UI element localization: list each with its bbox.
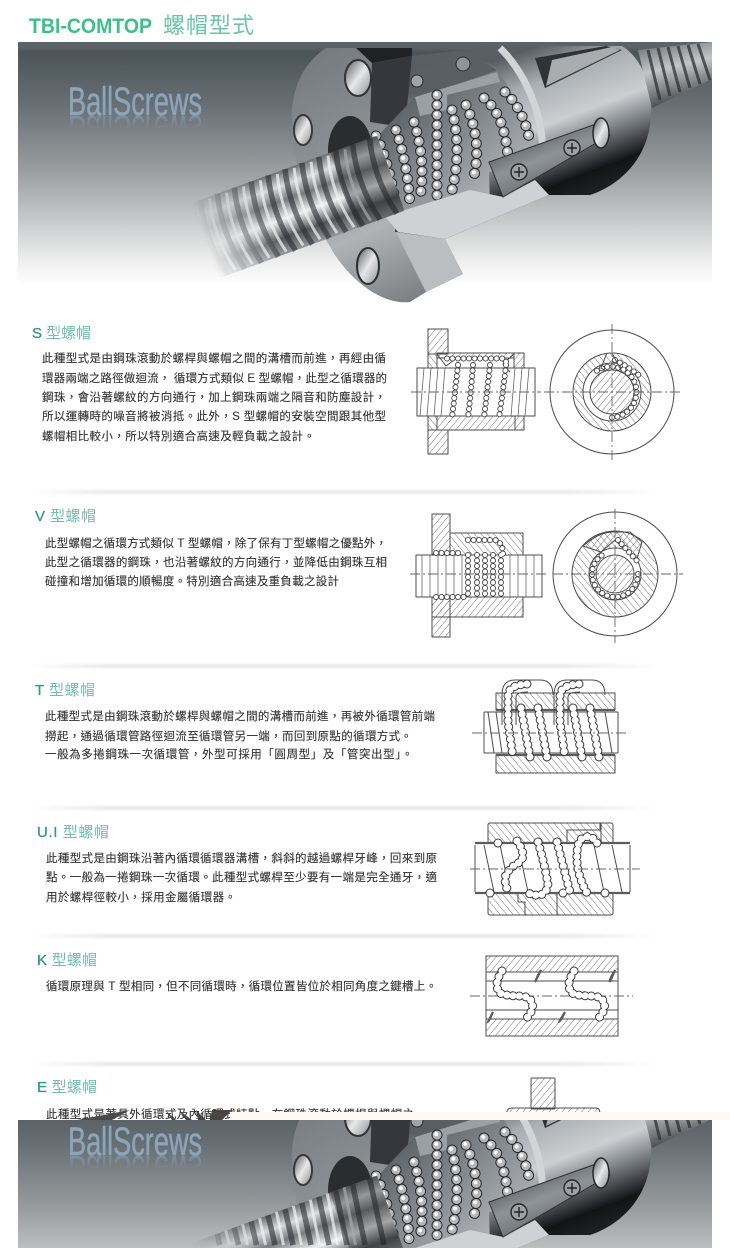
section: U.I type nut <box>37 823 640 915</box>
description: U.I type: 此種型式是由鋼珠沿著內循環循環器溝槽，斜斜的越過螺桿牙峰，回來到原 <box>46 851 437 865</box>
divider <box>30 664 660 668</box>
description: V type: 此型螺帽之循環方式類似 T 型螺帽，除了保有丁型螺帽之優點外， <box>45 536 387 550</box>
description: S type <box>42 351 387 443</box>
hero image: cutaway ball nut <box>191 42 712 302</box>
hero title: BallScrews: BallScrews <box>68 80 202 124</box>
heading: U.I type: U.I 型螺帽 <box>37 824 109 841</box>
description: T type: 此種型式是由鋼珠滾動於螺桿與螺帽之間的溝槽而前進，再被外循環管前端 <box>45 709 435 723</box>
section: E type nut <box>37 1078 600 1121</box>
description: T type <box>45 709 435 761</box>
repeated hero banner (cropped) <box>18 1120 712 1248</box>
divider <box>30 806 660 810</box>
divider <box>30 934 660 938</box>
description: S type: 鋼珠，會沿著螺紋的方向通行，加上鋼珠兩端之隔音和防塵設計， <box>42 390 386 404</box>
title: TBI-COMTOP <box>29 15 152 38</box>
diagram: T type <box>472 680 627 773</box>
dark image fragments above repeated banner <box>77 1110 232 1120</box>
repeated hero title: BallScrews: BallScrews <box>68 1147 202 1191</box>
section: K type nut <box>37 952 633 1036</box>
section: T type nut <box>35 680 627 773</box>
description: U.I type: 用於螺桿徑較小，採用金屬循環器。 <box>46 890 236 904</box>
diagram: S type section <box>411 329 541 454</box>
repeated hero image: cutaway ball nut <box>198 1120 710 1248</box>
description: E type: 此種型式是著具外循環式及內循環式特點，在鋼珠滾動於螺桿與螺帽之 <box>46 1107 414 1121</box>
description: S type: 環器兩端之路徑做迴流， 循環方式類似 E 型螺帽，此型之循環器的 <box>42 371 387 385</box>
heading: V type: V 型螺帽 <box>35 508 96 525</box>
description: T type: 撈起，通過循環管路徑迴流至循環管另一端，而回到原點的循環方式。 <box>45 729 412 743</box>
diagram: S type end view <box>544 324 681 460</box>
section: S type nut <box>32 324 681 460</box>
description: U.I type: 點。一般為一捲鋼珠一次循環。此種型式螺桿至少要有一端是完全通牙，適 <box>46 870 438 884</box>
description: S type: 螺帽相比較小，所以特別適合高速及輕負載之設計。 <box>42 429 315 443</box>
title <box>29 13 254 38</box>
hero title: BallScrews <box>68 80 202 151</box>
divider <box>30 490 660 494</box>
description: S type: 此種型式是由鋼珠滾動於螺桿與螺帽之間的溝槽而前進，再經由循 <box>42 351 386 365</box>
heading: K type: K 型螺帽 <box>37 952 97 969</box>
divider <box>30 1062 660 1066</box>
title: 螺帽型式 <box>163 13 254 38</box>
diagram: U.I type <box>470 823 640 915</box>
description: S type: 所以運轉時的噪音將被消抵。此外，S 型螺帽的安裝空間跟其他型 <box>42 409 386 423</box>
hero banner: ball screw <box>18 42 712 302</box>
cream strip <box>230 1112 730 1120</box>
repeated hero title: BallScrews <box>70 1126 202 1166</box>
heading: S type: S 型螺帽 <box>32 325 91 342</box>
hero title: BallScrews: BallScrews <box>68 107 202 151</box>
description: V type: 此型之循環器的鋼珠，也沿著螺紋的方向通行，並降低由鋼珠互相 <box>45 555 387 569</box>
diagram: V type section <box>410 514 548 637</box>
description: T type: 一般為多捲鋼珠一次循環管，外型可採用「圓周型」及「管突出型」。 <box>45 747 413 761</box>
diagram: E type <box>507 1078 600 1114</box>
description: V type: 碰撞和增加循環的順暢度。特別適合高速及重負載之設計 <box>45 574 339 588</box>
repeated hero title: BallScrews: BallScrews <box>68 1120 202 1164</box>
description: V type <box>45 536 387 588</box>
heading: T type: T 型螺帽 <box>35 682 95 699</box>
heading: E type: E 型螺帽 <box>37 1079 97 1096</box>
section: V type nut <box>35 508 683 643</box>
diagram: K type <box>470 956 633 1036</box>
diagram: V type end view <box>553 509 683 643</box>
description: U.I type <box>46 851 438 904</box>
description: K type: 循環原理與 T 型相同，但不同循環時，循環位置皆位於相同角度之鍵槽上。 <box>46 979 437 993</box>
